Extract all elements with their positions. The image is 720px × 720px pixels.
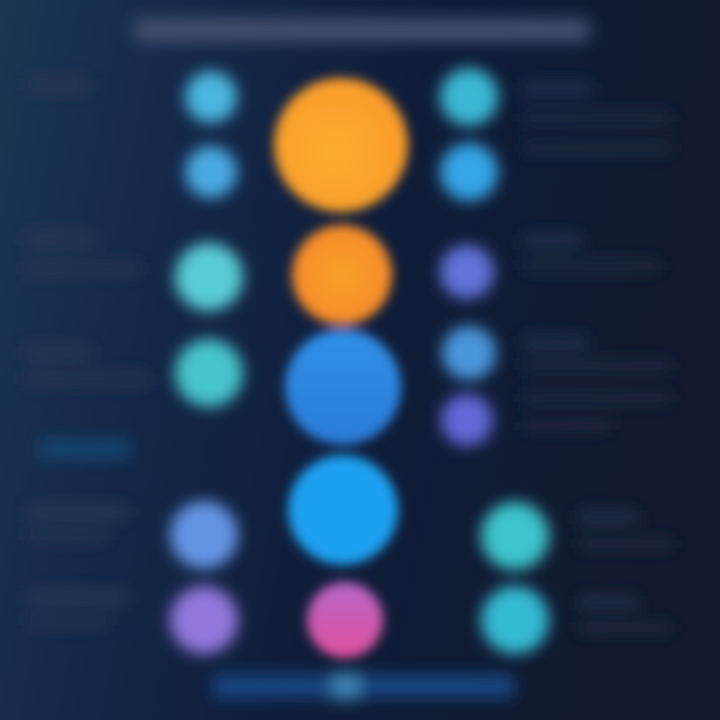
title: [134, 18, 590, 42]
center circles: [274, 78, 408, 658]
right column text blocks: [522, 82, 673, 634]
left circles: [170, 71, 243, 654]
right circles: [440, 68, 549, 654]
bottom bar: [214, 672, 514, 700]
left column text blocks: [25, 78, 150, 627]
